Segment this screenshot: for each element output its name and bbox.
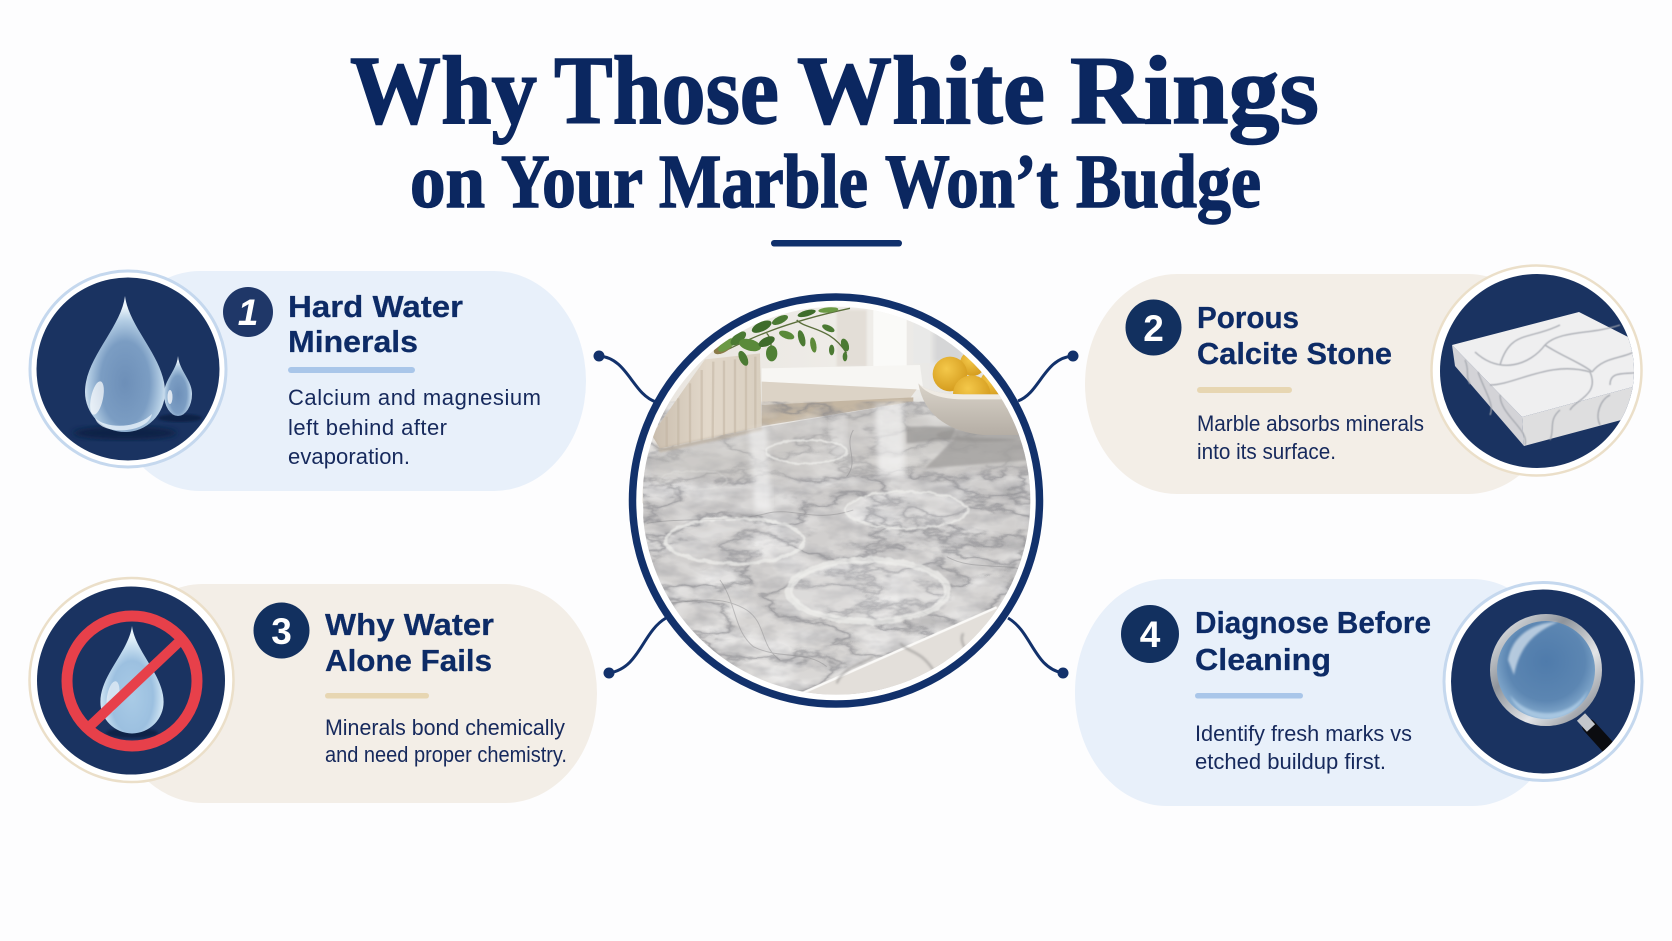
title: Marble xyxy=(659,140,868,224)
title: Your xyxy=(501,140,643,224)
badge 2: 2 xyxy=(1143,308,1164,349)
bowl of lemons xyxy=(938,429,1020,442)
title: on xyxy=(410,140,485,224)
heading: Porous xyxy=(1197,300,1299,335)
accent rule xyxy=(1195,693,1303,698)
body text: Marble absorbs minerals xyxy=(1197,411,1424,436)
plant xyxy=(720,308,850,357)
body text: left behind after xyxy=(288,415,447,440)
central photo: marble counter with white rings xyxy=(632,297,1040,704)
body text: into its surface. xyxy=(1197,439,1336,464)
heading: Hard Water xyxy=(288,289,463,324)
body text: and need proper chemistry. xyxy=(325,742,567,767)
pot xyxy=(652,353,762,448)
accent rule xyxy=(1197,387,1292,393)
marble surface layers xyxy=(643,402,1033,703)
accent rule xyxy=(288,367,415,373)
body text xyxy=(288,385,541,469)
body text: Minerals bond chemically xyxy=(325,715,565,740)
badge 1 xyxy=(223,287,273,337)
badge 3 xyxy=(254,602,310,658)
heading xyxy=(1195,605,1431,677)
panel: 1 hard water minerals xyxy=(30,271,586,491)
heading xyxy=(288,289,463,359)
title: Budge xyxy=(1076,140,1261,224)
badge 4: 4 xyxy=(1140,614,1161,655)
title: White xyxy=(797,37,1045,144)
icon: water drops xyxy=(30,271,226,467)
accent rule xyxy=(325,693,429,698)
heading xyxy=(1197,300,1392,371)
title xyxy=(350,37,1319,224)
heading: Diagnose Before xyxy=(1195,605,1431,640)
body text xyxy=(325,715,567,767)
badge 2 xyxy=(1126,300,1182,356)
panel: 3 why water alone fails xyxy=(30,578,597,803)
icon: crossed-out water drop xyxy=(30,578,234,782)
heading: Why Water xyxy=(325,607,494,642)
body text xyxy=(1195,721,1412,774)
title: Those xyxy=(554,37,779,144)
badge 3: 3 xyxy=(271,611,292,652)
icon: marble slab xyxy=(1432,266,1642,476)
badge 1: 1 xyxy=(238,292,258,333)
heading: Cleaning xyxy=(1195,642,1331,677)
badge 4 xyxy=(1121,605,1179,663)
title: Rings xyxy=(1070,37,1319,144)
connector lines xyxy=(594,350,1078,678)
body text: Calcium and magnesium xyxy=(288,385,541,410)
body text xyxy=(1197,411,1424,464)
icon: magnifying glass xyxy=(1444,582,1642,780)
infographic canvas xyxy=(28,54,1644,806)
heading xyxy=(325,607,494,678)
panel: 2 porous calcite stone xyxy=(1085,266,1642,494)
white mineral rings xyxy=(847,493,967,527)
body text: etched buildup first. xyxy=(1195,749,1386,774)
body text: evaporation. xyxy=(288,444,410,469)
front edge xyxy=(808,608,998,694)
heading: Calcite Stone xyxy=(1197,336,1392,371)
body text: Identify fresh marks vs xyxy=(1195,721,1412,746)
title: Won’t xyxy=(885,140,1058,224)
panel: 4 diagnose before cleaning xyxy=(1075,579,1642,806)
reflections xyxy=(925,437,1033,468)
heading: Minerals xyxy=(288,324,418,359)
title underline xyxy=(771,240,902,246)
heading: Alone Fails xyxy=(325,643,492,678)
title: Why xyxy=(350,37,537,144)
